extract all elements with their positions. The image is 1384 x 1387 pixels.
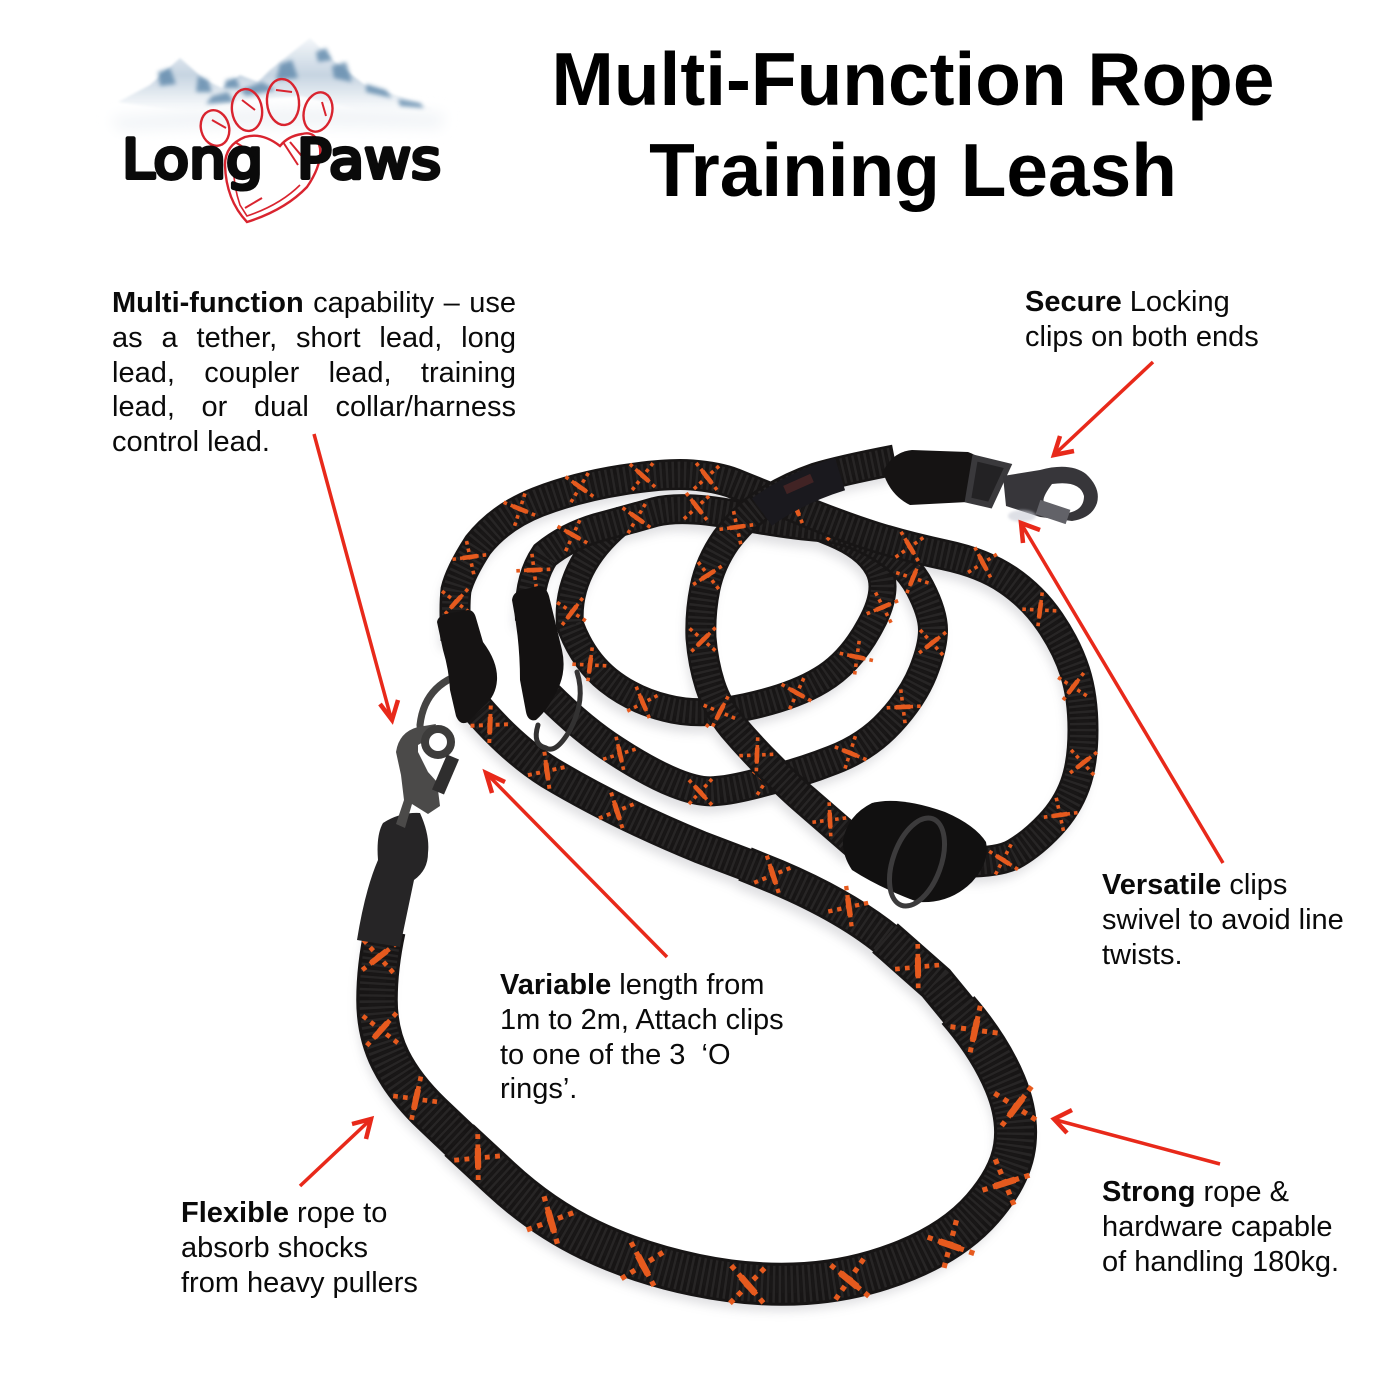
text: strong rope and hardware: hardware capable xyxy=(1102,1211,1333,1243)
text: multi-function capability: lead, coupler lead, training xyxy=(112,357,516,389)
rope: outer top loop xyxy=(442,462,1097,876)
text: variable length: rings’. xyxy=(500,1073,577,1105)
leather sleeve: upper left with O ring xyxy=(420,610,497,752)
title xyxy=(552,37,1274,212)
arrow: strong rope xyxy=(1054,1110,1220,1164)
text: flexible rope xyxy=(181,1197,418,1299)
rope: main lead section xyxy=(361,700,1038,1304)
logo wordmark: Paws xyxy=(297,128,441,191)
text: strong rope and hardware: of handling 180kg. xyxy=(1102,1246,1339,1278)
text: multi-function capability: control lead. xyxy=(112,426,270,458)
locking clip: top right end xyxy=(883,450,1098,522)
arrow: secure clips xyxy=(1054,362,1153,455)
logo paw print xyxy=(197,78,337,222)
leather sleeve: middle with O ring xyxy=(512,586,580,749)
text: flexible rope: from heavy pullers xyxy=(181,1267,418,1299)
text: versatile clips xyxy=(1102,869,1344,971)
logo wordmark xyxy=(122,128,441,191)
logo: Long Paws xyxy=(110,38,445,222)
rope: inner loop xyxy=(557,495,899,727)
rope: middle loop xyxy=(516,493,946,805)
text: flexible rope: absorb shocks xyxy=(181,1232,368,1264)
arrow: variable length xyxy=(486,773,667,957)
text: variable length: 1m to 2m, Attach clips xyxy=(500,1004,784,1036)
logo wordmark: Long xyxy=(122,128,263,191)
text: versatile clips: Versatile clips xyxy=(1102,869,1287,901)
text: multi-function capability: Multi-function capability – use xyxy=(112,287,516,319)
arrow: versatile clips xyxy=(1021,523,1223,863)
text: multi-function capability: as a tether, short lead, long xyxy=(112,322,516,354)
text: variable length: to one of the 3 ‘O xyxy=(500,1039,731,1071)
text: strong rope and hardware: Strong rope & xyxy=(1102,1176,1289,1208)
arrow: multi-function xyxy=(314,434,398,720)
text: variable length: Variable length from xyxy=(500,969,764,1001)
text: variable length xyxy=(500,969,784,1105)
locking clip: lower left end xyxy=(357,724,453,947)
text: versatile clips: swivel to avoid line xyxy=(1102,904,1344,936)
text: versatile clips: twists. xyxy=(1102,939,1183,971)
text: secure locking clips: clips on both ends xyxy=(1025,321,1259,353)
rope: slider section xyxy=(690,460,895,846)
text: strong rope and hardware xyxy=(1102,1176,1339,1278)
arrow: flexible rope xyxy=(300,1119,371,1186)
title: Multi-Function Rope xyxy=(552,37,1274,121)
text: secure locking clips xyxy=(1025,286,1259,353)
logo mountains xyxy=(110,38,445,130)
leather slider with O ring xyxy=(843,801,987,913)
text: multi-function capability: lead, or dual collar/harness xyxy=(112,391,516,423)
text: secure locking clips: Secure Locking xyxy=(1025,286,1230,318)
title: Training Leash xyxy=(649,128,1177,212)
text: flexible rope: Flexible rope to xyxy=(181,1197,387,1229)
rope shadows xyxy=(374,469,1080,1293)
text: multi-function capability xyxy=(112,287,516,458)
